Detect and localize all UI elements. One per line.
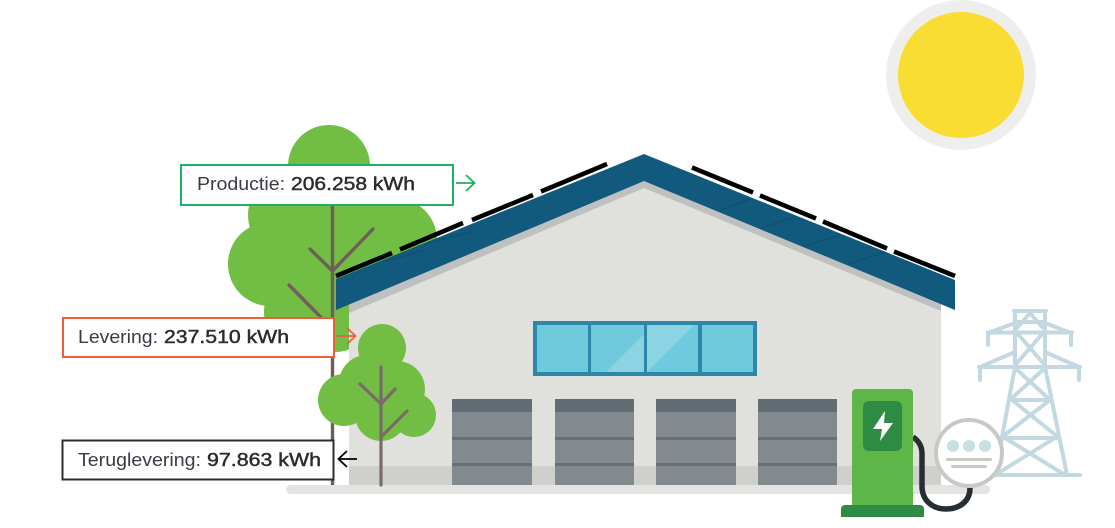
- icon: large tree: [228, 125, 437, 485]
- callout: Productie: Productie:: [197, 174, 285, 194]
- callout: Productie: 206.258 kWh: [291, 174, 415, 194]
- arrow: Levering: [337, 328, 356, 344]
- icon: small tree: [318, 324, 436, 485]
- icon: charging cable: [913, 437, 970, 509]
- roof shadow: [349, 180, 941, 313]
- icon: electricity meter: [936, 420, 1002, 486]
- callout: Teruglevering: Teruglevering:: [78, 450, 201, 470]
- callout: Levering: 237.510 kWh: [164, 327, 289, 347]
- ground: [286, 485, 990, 494]
- window: [533, 321, 757, 376]
- solar panels on roof: [336, 164, 955, 276]
- garage doors: [452, 399, 837, 485]
- arrow: Productie: [456, 175, 474, 191]
- arrow: Teruglevering: [338, 451, 357, 467]
- building wall: [349, 181, 941, 485]
- icon: transmission tower: [979, 311, 1080, 475]
- callout: Levering: Levering:: [78, 327, 158, 347]
- callout: Productie: [181, 165, 453, 205]
- callout: Levering: [63, 318, 334, 357]
- callout: Teruglevering: 97.863 kWh: [207, 450, 321, 470]
- icon: EV charger: [841, 389, 924, 517]
- icon: sun: [886, 0, 1036, 150]
- solar roof: [336, 154, 955, 310]
- callout: Teruglevering: [62, 440, 334, 480]
